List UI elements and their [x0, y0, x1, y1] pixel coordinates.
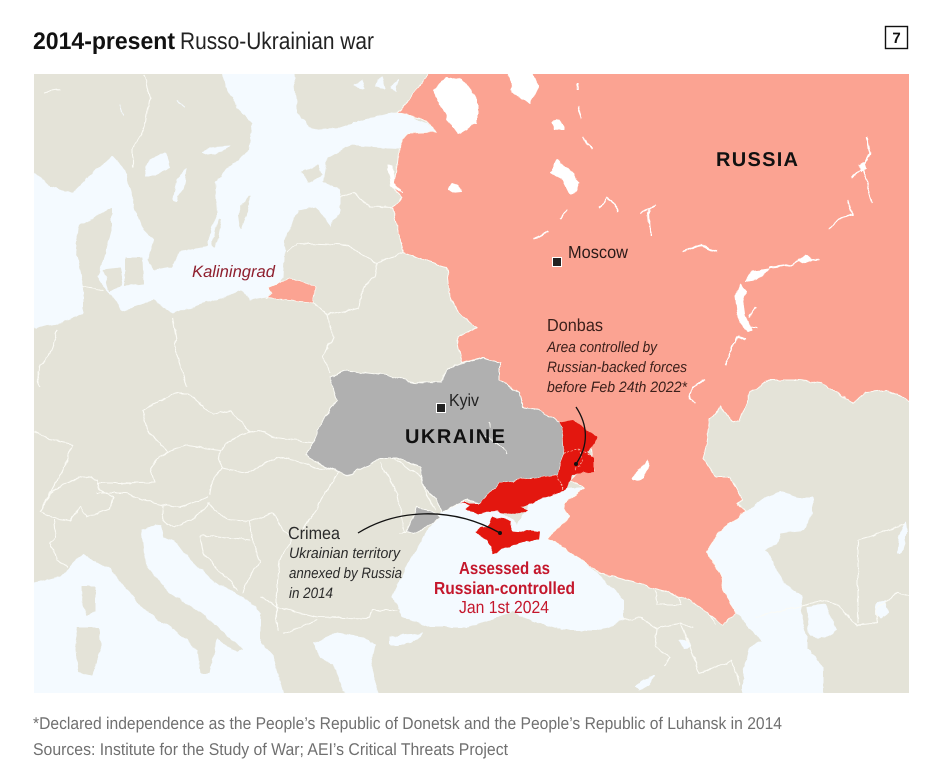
marker: Kyiv: Kyiv	[449, 390, 479, 410]
label: Kaliningrad: Kaliningrad	[192, 263, 276, 281]
country borders	[35, 75, 915, 685]
callout: Crimea: in 2014	[289, 585, 333, 602]
callout: Donbas: Russian-backed forces	[547, 359, 687, 376]
title: 2014-present	[33, 28, 175, 55]
marker: Moscow: Moscow	[568, 242, 628, 262]
label: UKRAINE: UKRAINE	[405, 426, 505, 448]
marker: Kyiv	[436, 390, 479, 412]
red areas: assessed as Russian-controlled	[460, 420, 598, 555]
swedish and finnish lakes	[145, 153, 170, 175]
lakes in russia	[388, 60, 866, 480]
page number badge	[886, 26, 908, 48]
islands	[82, 587, 95, 617]
title	[33, 28, 374, 55]
footnotes and sources: Sources: Institute for the Study of War; AEI’s Critical Threats Project	[33, 740, 508, 759]
callout: assessed as Russian-controlled	[434, 558, 575, 617]
callout: Crimea: annexed by Russia	[289, 565, 402, 582]
callout: Crimea	[288, 523, 402, 602]
label: RUSSIA: RUSSIA	[716, 149, 798, 171]
title: Russo-Ukrainian war	[180, 28, 374, 55]
russia	[392, 60, 925, 625]
callout: assessed as Russian-controlled: Assessed as	[459, 558, 550, 578]
footnotes and sources	[33, 714, 782, 759]
footnotes and sources: *Declared independence as the People’s Republic of Donetsk and the People’s Republic of Luhansk in 2014	[33, 714, 782, 733]
callout: Donbas: Donbas	[547, 315, 603, 335]
rivers in russia	[533, 83, 872, 403]
arrow: Donbas callout	[574, 407, 585, 466]
callout: Crimea: Crimea	[288, 523, 340, 543]
kaliningrad	[267, 278, 315, 302]
callout: Donbas: Area controlled by	[546, 339, 658, 356]
ukraine	[305, 358, 564, 534]
arrow: Crimea callout	[358, 514, 502, 535]
marker: Moscow	[552, 242, 628, 266]
callout: Crimea: Ukrainian territory	[289, 545, 401, 562]
callout: assessed as Russian-controlled: Russian-controlled	[434, 578, 575, 598]
page number badge: 7	[892, 30, 901, 47]
callout: assessed as Russian-controlled: Jan 1st 2024	[459, 597, 549, 617]
callout: Donbas: before Feb 24th 2022*	[547, 379, 688, 396]
callout: Donbas	[546, 315, 688, 396]
